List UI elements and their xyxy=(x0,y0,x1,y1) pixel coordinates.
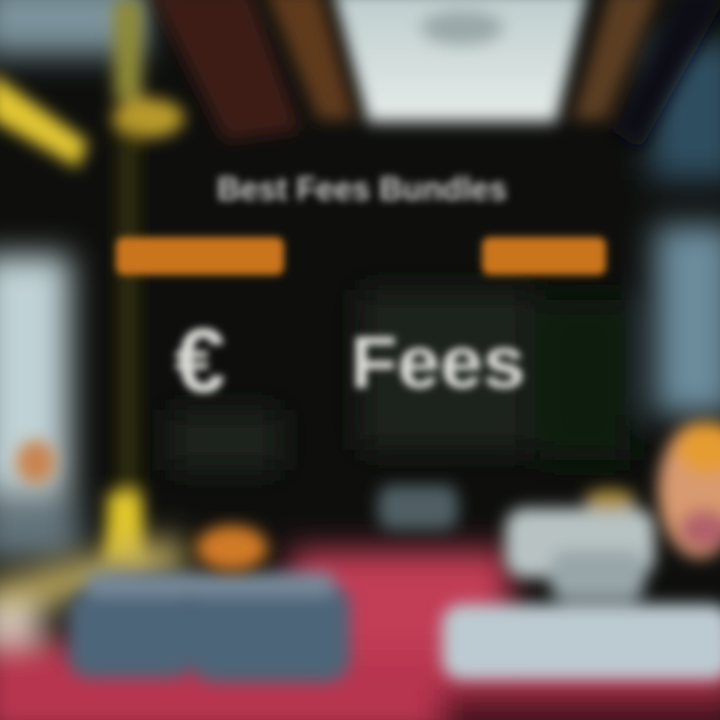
title: Best Fees Bundles xyxy=(217,170,507,207)
yellow beam and post xyxy=(0,0,184,565)
skylight xyxy=(332,0,588,122)
orange cushion xyxy=(196,525,268,571)
background: side windows and ceiling xyxy=(0,0,720,560)
fees word: Fees xyxy=(350,321,526,404)
orange label pill right xyxy=(482,237,606,275)
gray cushions left xyxy=(68,572,350,682)
distant gray seat xyxy=(378,485,458,530)
euro symbol: € xyxy=(174,310,226,412)
wooden ceiling beams xyxy=(150,0,720,150)
orange accent left window xyxy=(16,440,56,484)
orange label pill left xyxy=(116,237,284,275)
white sofa right xyxy=(442,489,720,680)
floor and rug xyxy=(0,535,720,720)
orange round object right xyxy=(658,422,720,558)
